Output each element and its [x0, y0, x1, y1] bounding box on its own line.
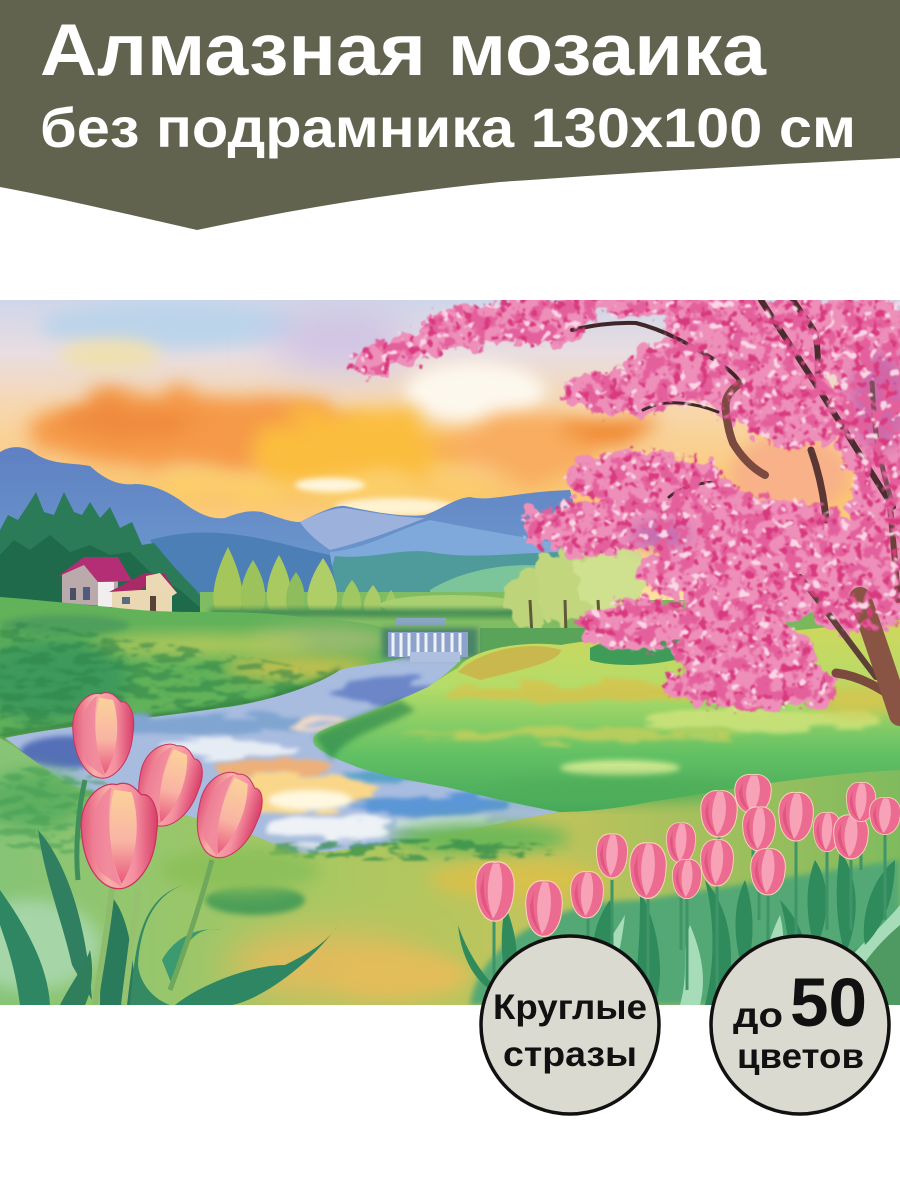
right meadow	[313, 620, 900, 812]
subtitle: без подрамника 130х100 см	[40, 96, 856, 159]
river	[5, 655, 560, 853]
green valley with light trees	[200, 547, 513, 619]
sky with sunset clouds	[0, 300, 900, 600]
tulip leaves, right bed	[458, 835, 900, 1005]
header banner	[0, 0, 900, 230]
left meadow	[0, 597, 418, 750]
cherry blossom mottling	[352, 290, 900, 708]
distant mountains	[0, 447, 574, 596]
farmhouse with pink roof	[57, 557, 177, 612]
foreground grass	[0, 738, 900, 1005]
badge: up to 50 colours: до	[733, 996, 783, 1035]
cherry tree branches	[572, 300, 900, 715]
trees behind the right meadow	[480, 540, 650, 654]
large tulips, left	[73, 693, 270, 889]
waterfall	[382, 618, 478, 662]
tulip leaves, left bunch	[0, 780, 338, 1005]
cherry tree blossom base	[352, 290, 900, 708]
badge: round rhinestones: стразы	[503, 1035, 637, 1074]
badge: up to 50 colours: цветов	[737, 1037, 864, 1076]
badge: up to 50 colours: 50	[790, 964, 867, 1041]
badge: up to 50 colours	[711, 936, 889, 1114]
evergreen forest	[0, 492, 212, 612]
badge: round rhinestones	[481, 936, 659, 1114]
title: Алмазная мозаика	[40, 10, 768, 91]
small tulips, right	[476, 774, 900, 936]
painting: spring landscape	[0, 290, 900, 1005]
badge: round rhinestones: Круглые	[493, 988, 647, 1027]
